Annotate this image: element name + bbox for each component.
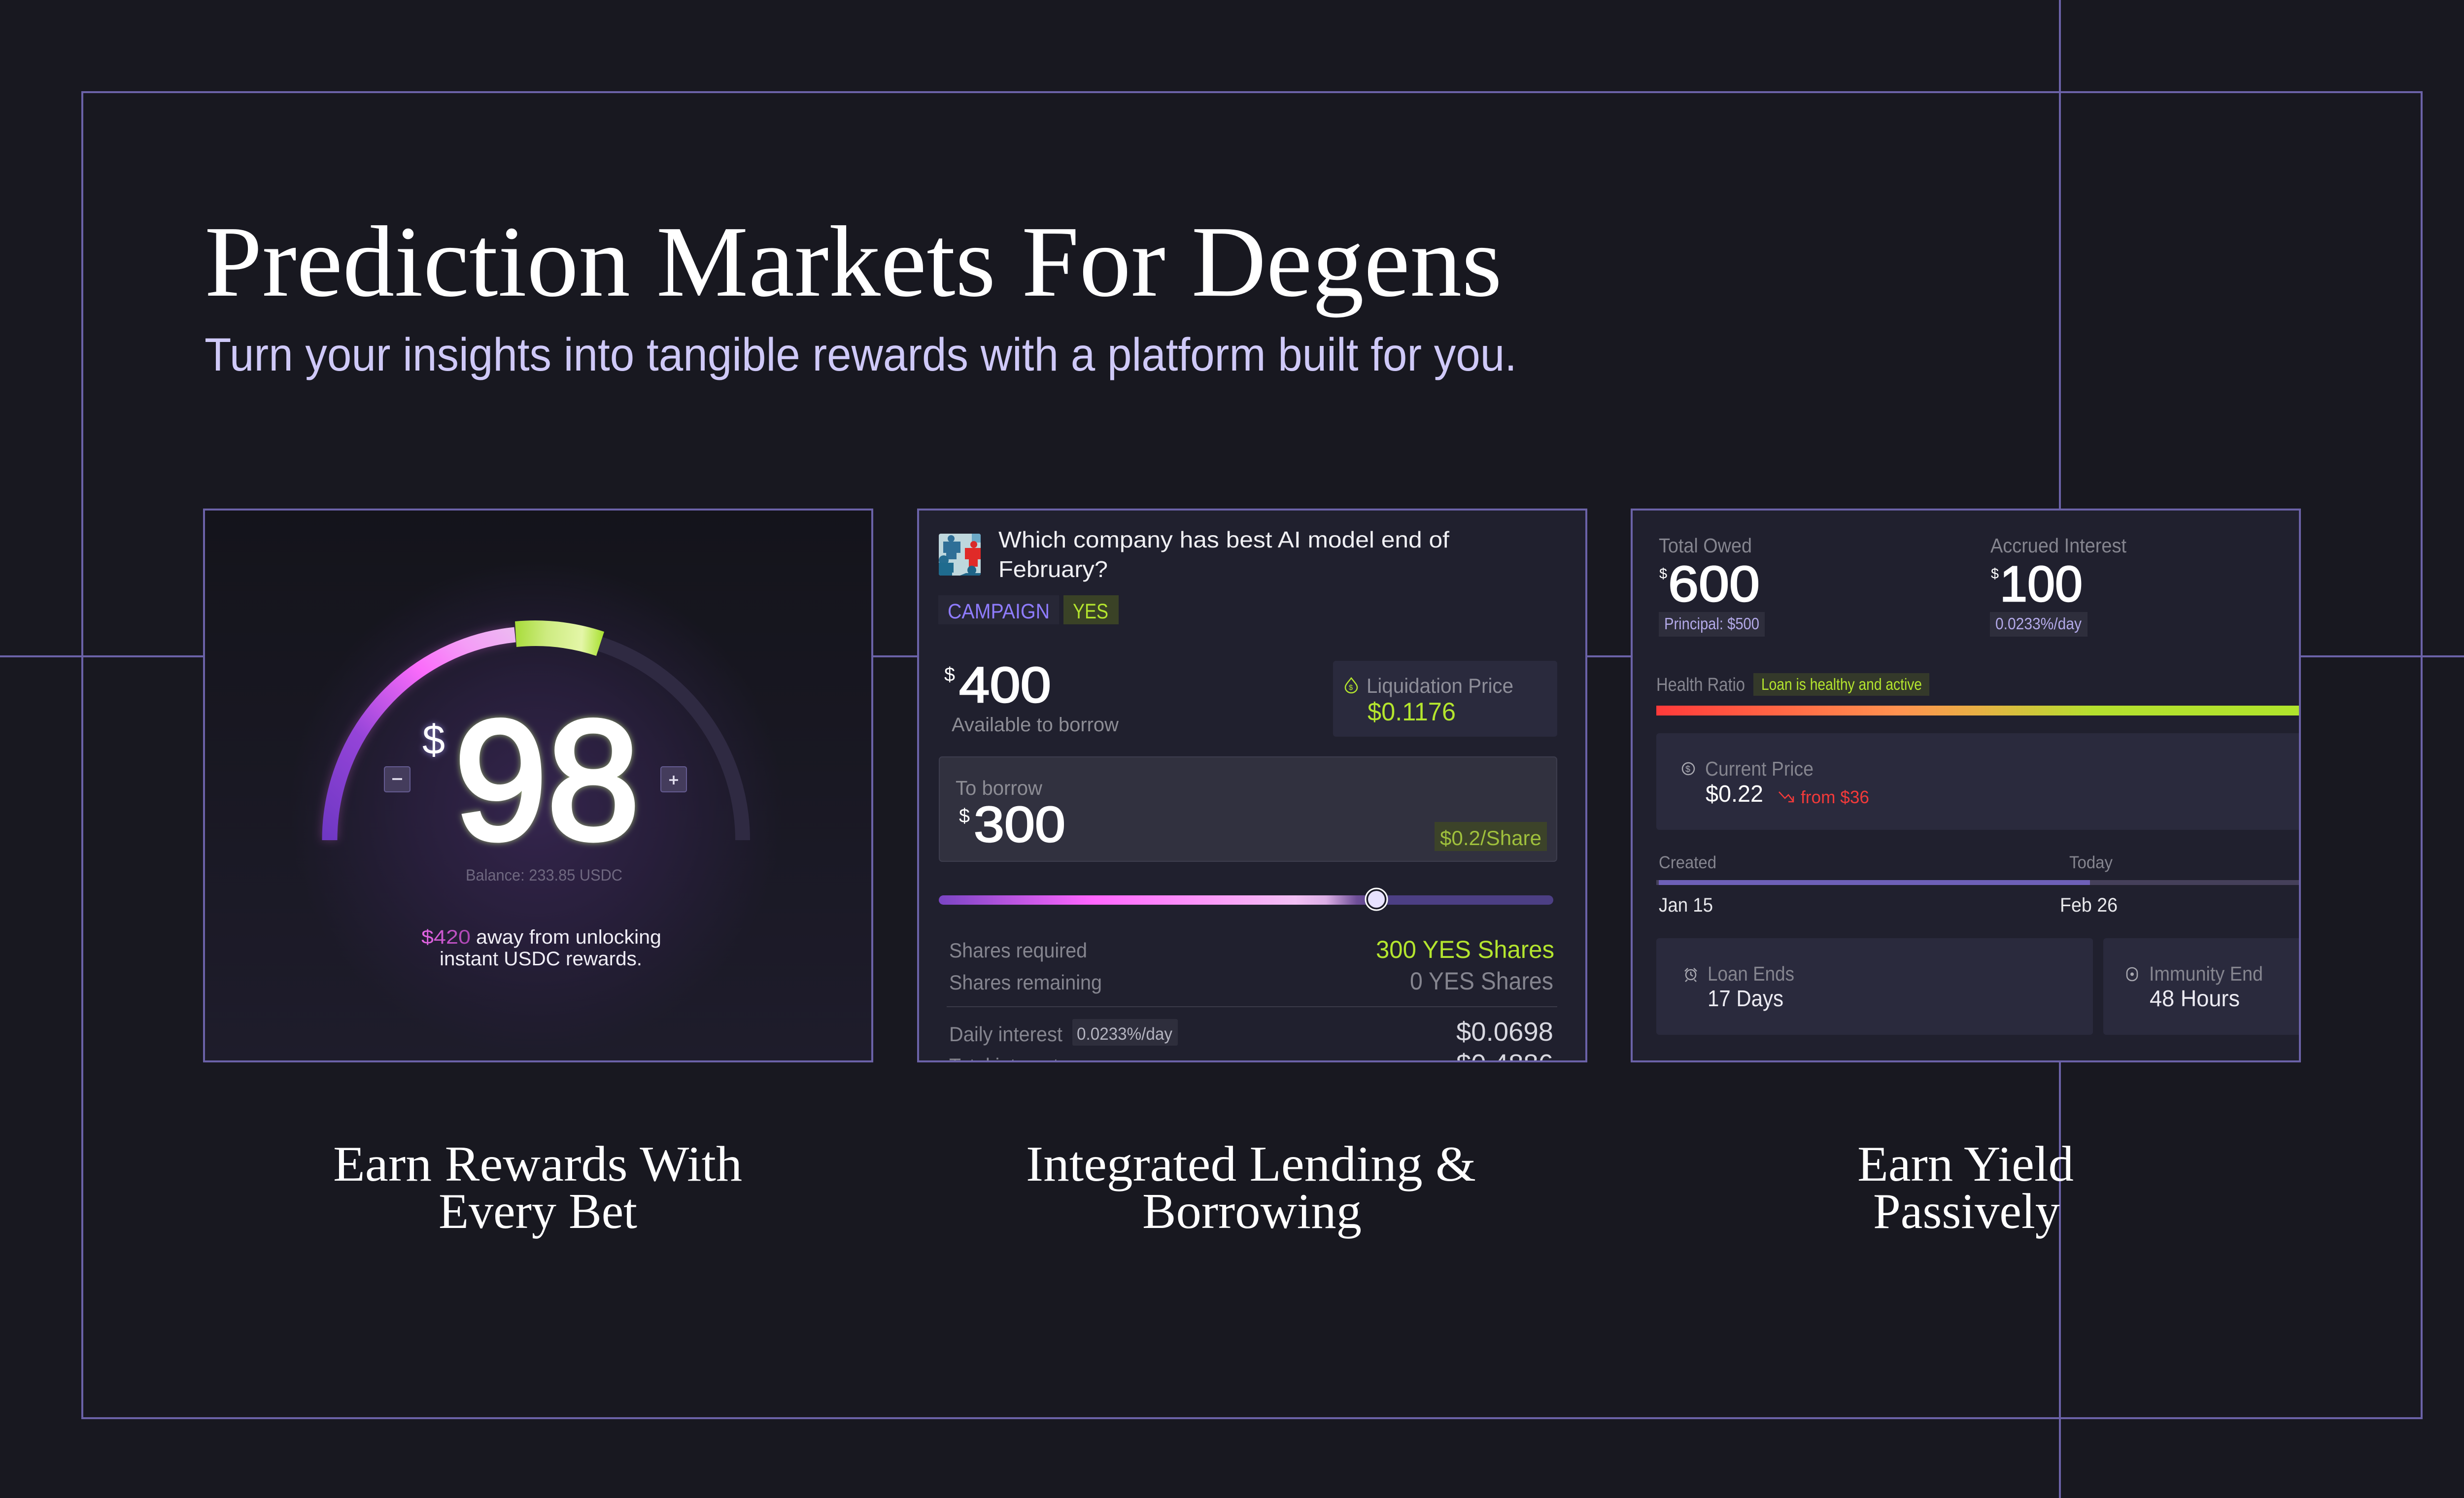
to borrow box: To borrow — [956, 777, 1042, 799]
amount 98: $ — [422, 716, 445, 763]
amount 98: 98 — [454, 685, 640, 875]
available to borrow — [944, 666, 1119, 731]
icon: trend down arrow — [1779, 792, 1793, 802]
immunity end box: 48 Hours — [2150, 986, 2240, 1011]
shares rows — [949, 936, 1554, 995]
tag: yes — [1063, 595, 1119, 624]
to borrow box: $ — [959, 805, 970, 827]
caption: yield: Passively — [1873, 1184, 2060, 1239]
question: February? — [998, 556, 1108, 582]
icon: market thumbnail — [939, 534, 981, 576]
total owed — [1659, 534, 1765, 637]
liquidation price box — [1333, 661, 1557, 737]
loan timeline: Created — [1659, 853, 1716, 872]
caption: rewards: Every Bet — [439, 1184, 637, 1239]
icon: drop — [1345, 678, 1357, 693]
rewards message: instant USDC rewards. — [440, 948, 642, 970]
total owed: Total Owed — [1659, 534, 1752, 557]
loan ends box: 17 Days — [1708, 986, 1783, 1011]
current price box — [1656, 733, 2307, 830]
balance: Balance: 233.85 USDC — [466, 866, 622, 884]
available to borrow: 400 — [959, 657, 1051, 713]
immunity end box: Immunity End — [2149, 962, 2263, 985]
icon: coin: $ — [1685, 764, 1690, 774]
loan timeline — [1656, 853, 2300, 916]
total owed: Principal: $500 — [1664, 614, 1759, 633]
price per share tag: $0.2/Share — [1440, 826, 1541, 850]
title: Prediction Markets For Degens — [205, 205, 1502, 318]
panel border: lending — [918, 510, 1586, 1061]
panel border: rewards — [204, 510, 872, 1061]
available to borrow: Available to borrow — [952, 714, 1119, 736]
rewards message: away from unlocking — [476, 926, 661, 948]
panel: rewards gauge — [204, 510, 872, 1061]
health ratio: Loan is healthy and active — [1761, 675, 1922, 693]
health ratio: Health Ratio — [1656, 675, 1745, 695]
available to borrow: $ — [944, 664, 955, 685]
loan ends box — [1656, 938, 2093, 1035]
to borrow box — [939, 757, 1557, 861]
caption: yield — [1857, 1136, 2074, 1239]
interest rows: 0.0233%/day — [1077, 1024, 1172, 1044]
total owed: $ — [1659, 566, 1667, 582]
loan timeline: Today — [2069, 853, 2113, 872]
caption: yield: Earn Yield — [1857, 1136, 2074, 1192]
tag: campaign — [949, 604, 1048, 619]
amount 98: $ — [422, 716, 445, 763]
icon: alarm — [1685, 968, 1697, 982]
caption: rewards — [333, 1136, 742, 1239]
shares rows: 0 YES Shares — [1410, 967, 1553, 995]
shares rows: Shares required — [949, 939, 1087, 962]
interest rows: Total interest — [949, 1054, 1059, 1077]
accrued interest — [1990, 534, 2127, 637]
question: Which company has best AI model end of — [998, 527, 1449, 552]
panel border: yield — [1632, 510, 2300, 1061]
caption: lending: Borrowing — [1142, 1184, 1362, 1239]
accrued interest: 0.0233%/day — [1995, 614, 2082, 633]
total owed: 600 — [1668, 556, 1760, 612]
shares rows: Shares remaining — [949, 971, 1102, 994]
tag: campaign: CAMPAIGN — [948, 600, 1050, 623]
caption: rewards: Earn Rewards With — [333, 1136, 742, 1192]
interest rows: Daily interest — [949, 1022, 1062, 1046]
liquidation price box: Liquidation Price — [1367, 674, 1513, 697]
plus button — [661, 767, 686, 792]
accrued interest: $ — [1991, 566, 1999, 582]
immunity end box — [2103, 938, 2310, 1035]
current price box: from $36 — [1801, 787, 1869, 807]
liquidation price box: $0.1176 — [1368, 698, 1456, 726]
panel: lending and borrowing — [918, 510, 1586, 1079]
caption: lending: Integrated Lending & — [1026, 1136, 1476, 1192]
interest rows — [949, 1017, 1553, 1079]
icon: immunity — [2127, 968, 2137, 981]
interest rows: $0.4886 — [1456, 1049, 1553, 1079]
rewards message — [421, 926, 661, 970]
minus button — [384, 767, 410, 792]
rewards message: $420 — [421, 926, 471, 948]
tag: yes: YES — [1073, 600, 1108, 623]
current price box: $0.22 — [1706, 781, 1763, 807]
panel: passive yield — [1632, 510, 2310, 1061]
caption: lending — [1026, 1136, 1476, 1239]
loan timeline: Feb 26 — [2060, 894, 2118, 916]
icon: coin — [1682, 763, 1694, 775]
amount 98: 98 — [454, 685, 640, 875]
shares rows: 300 YES Shares — [1376, 936, 1554, 963]
interest rows: $0.0698 — [1456, 1017, 1553, 1047]
question — [998, 527, 1449, 582]
slider — [939, 888, 1553, 910]
health ratio — [1656, 673, 2300, 715]
current price box: Current Price — [1705, 757, 1814, 780]
loan timeline: Jan 15 — [1659, 894, 1713, 916]
to borrow box: 300 — [974, 796, 1065, 852]
subtitle: Turn your insights into tangible rewards with a platform built for you. — [205, 329, 1517, 381]
gauge arc — [330, 620, 743, 840]
accrued interest: Accrued Interest — [1990, 534, 2127, 557]
icon: drop: $ — [1349, 683, 1353, 692]
accrued interest: 100 — [2000, 556, 2083, 612]
loan ends box: Loan Ends — [1708, 962, 1794, 985]
